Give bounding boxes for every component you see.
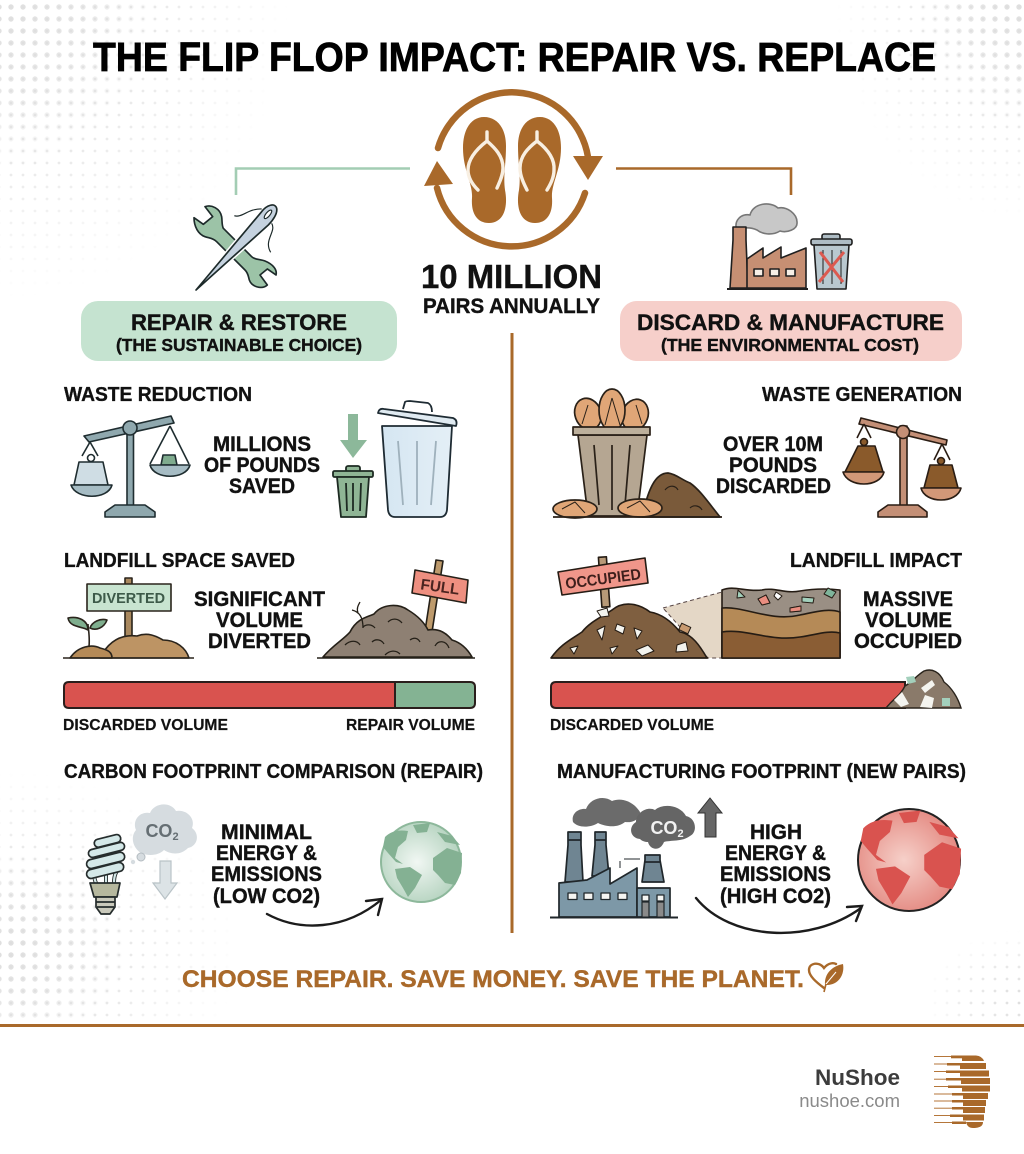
text: millions of pounds saved: SAVED: [229, 475, 295, 498]
icon: heart and leaf: [809, 963, 843, 992]
text: massive volume occupied: OCCUPIED: [854, 630, 962, 653]
repair heading pill: REPAIR & RESTORE: [131, 310, 347, 335]
icon: small CO2 cloud: CO: [145, 821, 172, 841]
brand name: NuShoe: [815, 1065, 900, 1090]
brand url: nushoe.com: [799, 1090, 900, 1111]
icon: wrench and needle: [194, 205, 277, 290]
logo: striped foot: [934, 1056, 990, 1128]
icon: green down arrow: [340, 414, 367, 458]
footer rule: [0, 1024, 1024, 1027]
heading: waste reduction: WASTE REDUCTION: [64, 383, 252, 406]
icon: full landfill mound: FULL: [419, 576, 460, 599]
icon: small green bin: [333, 466, 373, 517]
heading: landfill space saved: LANDFILL SPACE SAVED: [64, 549, 295, 572]
icon: CO2 cloud, high emissions: 2: [677, 828, 684, 840]
icon: balance scale, discard: [843, 418, 961, 517]
panel: discard and manufacture: [550, 204, 966, 933]
icon: factory and crossed bin: [727, 204, 852, 289]
heading: carbon footprint comparison: CARBON FOOTPRINT COMPARISON (REPAIR): [64, 760, 483, 783]
text: over 10M pounds discarded: OVER 10M: [723, 433, 823, 456]
heading: waste generation: WASTE GENERATION: [762, 383, 962, 406]
text: high energy and emissions: [720, 821, 831, 908]
text: minimal energy and emissions: EMISSIONS: [211, 863, 322, 886]
icon: small CO2 cloud: 2: [172, 831, 179, 843]
title: THE FLIP FLOP IMPACT: REPAIR VS. REPLACE: [93, 34, 936, 80]
label: discarded volume: DISCARDED VOLUME: [63, 717, 228, 734]
text: high energy and emissions: HIGH: [750, 821, 802, 844]
icon: balance scale, repair: [71, 416, 190, 517]
text: millions of pounds saved: MILLIONS: [213, 433, 311, 456]
text: massive volume occupied: MASSIVE: [863, 588, 953, 611]
icon: diverted sign and mound: [63, 578, 194, 658]
connector: discard branch: [616, 168, 791, 195]
text: millions of pounds saved: OF POUNDS: [204, 454, 320, 477]
text: minimal energy and emissions: [211, 821, 322, 908]
text: minimal energy and emissions: ENERGY &: [216, 842, 317, 865]
label: repair volume: REPAIR VOLUME: [346, 717, 475, 734]
heading: manufacturing footprint: MANUFACTURING FOOTPRINT (NEW PAIRS): [557, 760, 966, 783]
icon: low energy bulb: [86, 834, 126, 914]
central statistic: 10 MILLION: [421, 258, 602, 295]
bar: discarded volume with waste pile: [551, 670, 961, 708]
repair heading pill: [81, 301, 397, 361]
text: minimal energy and emissions: MINIMAL: [221, 821, 312, 844]
icon: large blue bin: [378, 401, 457, 517]
central statistic: PAIRS ANNUALLY: [423, 295, 600, 318]
panel: repair and restore: [63, 205, 483, 926]
text: high energy and emissions: EMISSIONS: [720, 863, 831, 886]
arrow: to red globe: [696, 898, 862, 933]
icon: occupied landfill with cross section: OCCUPIED: [564, 566, 642, 593]
text: significant volume diverted: [194, 588, 325, 653]
icon: diverted sign and mound: DIVERTED: [92, 590, 165, 607]
icon: up arrow, high emissions: [698, 798, 722, 837]
heading: landfill impact: LANDFILL IMPACT: [790, 549, 962, 572]
discard heading pill: (THE ENVIRONMENTAL COST): [661, 335, 919, 355]
bar: discarded versus repair volume: [64, 682, 475, 708]
text: significant volume diverted: DIVERTED: [208, 630, 311, 653]
icon: flip flops in recycling ring: [424, 92, 603, 246]
arrow: to green globe: [267, 899, 382, 926]
center divider: [510, 333, 514, 933]
text: massive volume occupied: [854, 588, 962, 653]
discard heading pill: [620, 301, 962, 361]
icon: dark smoke cloud: [573, 798, 640, 827]
icon: occupied landfill with cross section: [551, 557, 840, 658]
repair heading pill: (THE SUSTAINABLE CHOICE): [116, 335, 362, 355]
text: over 10M pounds discarded: POUNDS: [729, 454, 817, 477]
text: over 10M pounds discarded: [716, 433, 831, 498]
label: discarded volume: DISCARDED VOLUME: [550, 717, 714, 734]
central statistic: [421, 258, 602, 318]
icon: down arrow, low emissions: [153, 861, 177, 899]
text: high energy and emissions: (HIGH CO2): [720, 885, 831, 908]
tagline: CHOOSE REPAIR. SAVE MONEY. SAVE THE PLANET.: [182, 966, 804, 993]
text: millions of pounds saved: [204, 433, 320, 498]
icon: CO2 cloud, high emissions: CO: [650, 818, 677, 838]
connector: repair branch: [236, 168, 410, 195]
icon: CO2 cloud, high emissions: [631, 806, 695, 849]
text: over 10M pounds discarded: DISCARDED: [716, 475, 831, 498]
text: significant volume diverted: VOLUME: [216, 609, 303, 632]
discard heading pill: DISCARD & MANUFACTURE: [637, 310, 944, 335]
text: massive volume occupied: VOLUME: [865, 609, 952, 632]
text: significant volume diverted: SIGNIFICANT: [194, 588, 325, 611]
text: high energy and emissions: ENERGY &: [725, 842, 826, 865]
icon: small CO2 cloud: [131, 804, 197, 864]
icon: bin of discarded flip flops: [553, 389, 722, 518]
icon: full landfill mound: [317, 560, 475, 658]
icon: green globe: [381, 822, 462, 902]
text: minimal energy and emissions: (LOW CO2): [213, 885, 320, 908]
icon: heavy industry factory: [550, 832, 678, 918]
icon: red globe: [858, 809, 961, 911]
